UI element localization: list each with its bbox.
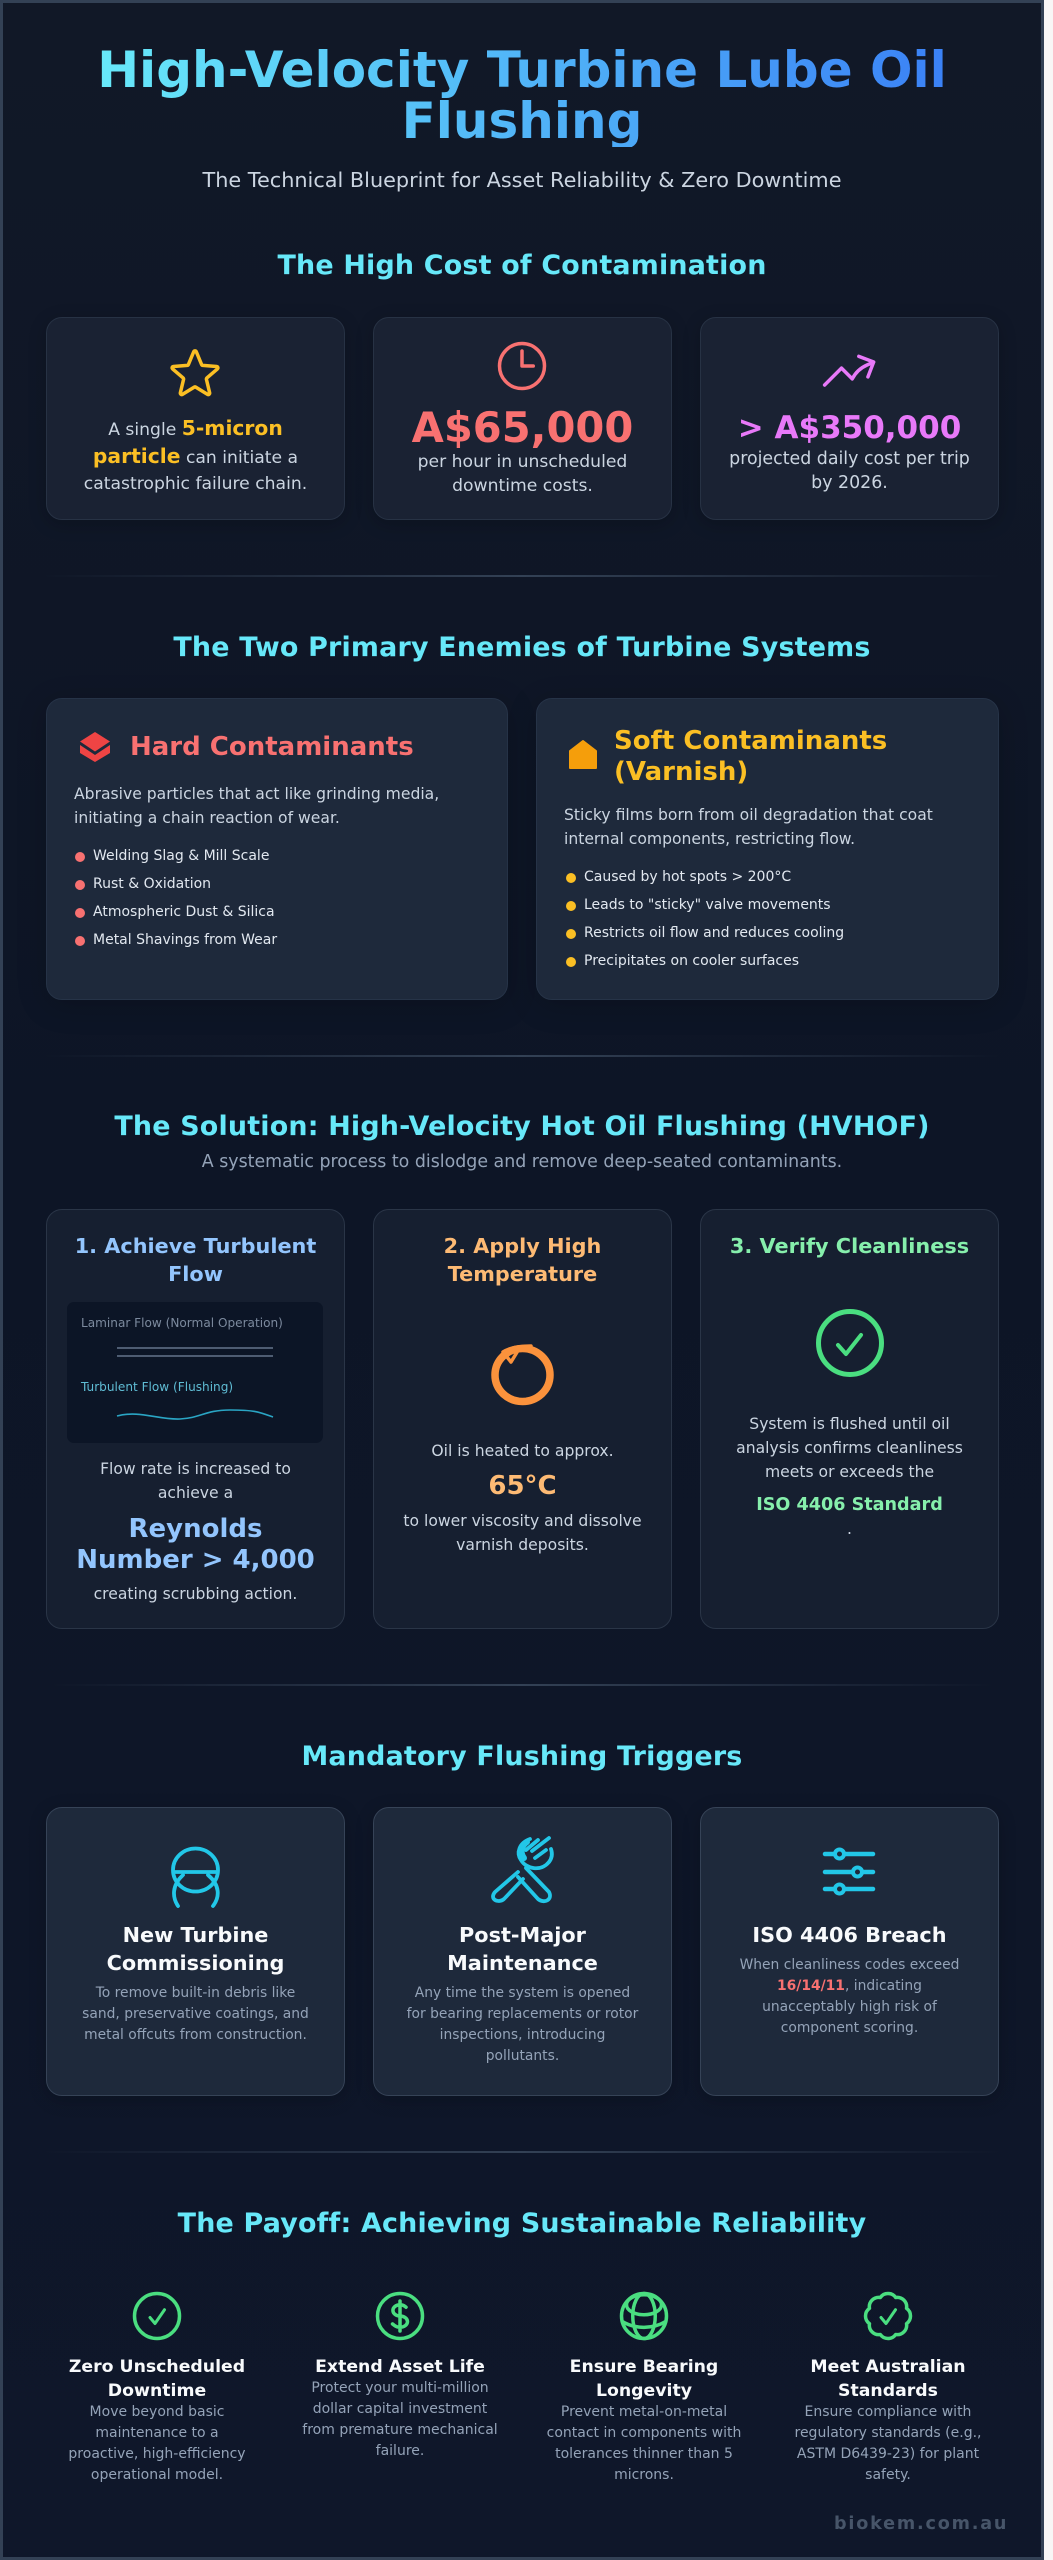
- text: hard description: [74, 785, 439, 827]
- text: ISO 4406 breach: [740, 1957, 959, 2036]
- text: viscosity: to lower viscosity and dissolve: [403, 1512, 642, 1530]
- text: flushed until: analysis confirms cleanliness: [736, 1439, 963, 1457]
- title: Flushing: [402, 92, 642, 150]
- text: new turbine: To remove built-in debris like: [96, 1985, 295, 2001]
- text: bearing longevity: [547, 2404, 741, 2483]
- text: daily cost: [729, 449, 970, 493]
- text: viscosity: varnish deposits.: [456, 1536, 589, 1554]
- list: hard contaminants: Welding Slag & Mill Scale: [93, 848, 269, 864]
- heading: step 3: 3. Verify Cleanliness: [730, 1234, 969, 1258]
- text: zero downtime: [68, 2404, 246, 2483]
- heading: bearing longevity: Ensure Bearing: [570, 2357, 718, 2377]
- text: soft description: internal components, restricting flow.: [564, 830, 855, 848]
- icon: sliders: [822, 1848, 876, 1896]
- text: 5-micron particle: particle can initiate a: [93, 444, 298, 468]
- panel: downtime cost: [373, 317, 672, 520]
- text: 5-micron particle: [84, 416, 307, 494]
- text: extend asset life: from premature mechanical: [302, 2422, 498, 2438]
- list: soft contaminants: Leads to "sticky" valve movements: [584, 897, 831, 913]
- text: soft description: [564, 806, 933, 848]
- text: soft description: Sticky films born from oil degradation that coat: [564, 806, 933, 824]
- text: extend asset life: Protect your multi-million: [311, 2380, 489, 2396]
- heading: zero downtime: Zero Unscheduled: [69, 2357, 245, 2377]
- text: bearing longevity: Prevent metal-on-metal: [561, 2404, 727, 2420]
- text: flushed until: [736, 1415, 963, 1481]
- icon: wrench and screwdriver: [491, 1836, 554, 1904]
- list: soft contaminants: Restricts oil flow and reduces cooling: [584, 925, 844, 941]
- text: flow rate: Flow rate is increased to: [100, 1460, 291, 1478]
- icon: badge check: [858, 2286, 918, 2346]
- heading: post-major maintenance: [447, 1923, 598, 1975]
- stat: ISO 4406 standard: ISO 4406 Standard: [756, 1495, 943, 1515]
- diagram: laminar vs turbulent flow: Turbulent Flow (Flushing): [81, 1380, 233, 1394]
- heading: mandatory triggers: Mandatory Flushing Triggers: [301, 1741, 743, 1772]
- text: flushed until: meets or exceeds the: [765, 1463, 934, 1481]
- payoff: zero unscheduled downtime: [68, 2292, 246, 2483]
- text: extend asset life: [302, 2380, 498, 2459]
- heading: two primary enemies: The Two Primary Enemies of Turbine Systems: [173, 632, 871, 663]
- text: bearing longevity: microns.: [614, 2467, 674, 2483]
- footer: biokem.com.au: biokem.com.au: [834, 2514, 1008, 2534]
- icon: soft contaminants: [569, 740, 597, 769]
- text: downtime cost: per hour in unscheduled: [418, 452, 627, 472]
- text: hard description: Abrasive particles that act like grinding media,: [74, 785, 439, 803]
- icon: trending up: [822, 354, 876, 387]
- text: zero downtime: operational model.: [91, 2467, 223, 2483]
- diagram: laminar vs turbulent flow: Laminar Flow (Normal Operation): [81, 1316, 283, 1330]
- payoff: extend asset life: [302, 2292, 498, 2459]
- subtitle: The Technical Blueprint for Asset Reliability & Zero Downtime: [202, 168, 842, 192]
- title: [0, 45, 1044, 147]
- text: australian standards: ASTM D6439-23) for plant: [797, 2446, 979, 2462]
- text: ISO 4406 breach: component scoring.: [781, 2020, 918, 2036]
- heading: post-major maintenance: Post-Major: [459, 1923, 586, 1947]
- icon: check circle: [132, 2292, 182, 2340]
- text: hard description: initiating a chain reaction of wear.: [74, 809, 340, 827]
- heading: bearing longevity: Longevity: [596, 2381, 692, 2401]
- text: downtime cost: downtime costs.: [452, 476, 593, 496]
- panel: soft contaminants: [536, 698, 999, 1000]
- heading: post-major maintenance: Maintenance: [447, 1951, 598, 1975]
- text: australian standards: safety.: [865, 2467, 911, 2483]
- list: hard contaminants: [75, 848, 278, 948]
- stat: A$350,000: > A$350,000: [738, 410, 961, 446]
- text: ISO 4406 breach: When cleanliness codes exceed: [740, 1957, 959, 1973]
- panel: ISO 4406 breach: [700, 1807, 999, 2096]
- payoff: bearing longevity: [547, 2292, 741, 2483]
- list: hard contaminants: Atmospheric Dust & Silica: [93, 904, 275, 920]
- text: australian standards: regulatory standards (e.g.,: [794, 2425, 982, 2441]
- heading: step 2: 2. Apply High: [444, 1234, 601, 1258]
- list: hard contaminants: Metal Shavings from Wear: [93, 932, 277, 948]
- panel: new turbine: [46, 1807, 345, 2096]
- heading: step 2: Temperature: [448, 1262, 597, 1286]
- heading: step 1: [75, 1234, 316, 1286]
- text: viscosity: [403, 1512, 642, 1554]
- heading: soft contaminants: (Varnish): [614, 757, 748, 787]
- title: High-Velocity Turbine Lube Oil: [97, 41, 947, 99]
- heading: high cost of contamination: The High Cost of Contamination: [277, 250, 767, 281]
- heading: the payoff: The Payoff: Achieving Sustainable Reliability: [178, 2208, 866, 2239]
- text: flow rate: achieve a: [158, 1484, 233, 1502]
- stat: A$65,000: A$65,000: [412, 403, 633, 452]
- text: ISO 4406 breach: unacceptably high risk of: [762, 1999, 937, 2015]
- text: new turbine: sand, preservative coatings, and: [82, 2006, 309, 2022]
- heading: soft contaminants: [614, 726, 887, 787]
- icon: globe: [620, 2292, 668, 2340]
- text: post-major maintenance: Any time the system is opened: [415, 1985, 630, 2001]
- heading: new turbine: [107, 1923, 284, 1975]
- text: extend asset life: failure.: [376, 2443, 424, 2459]
- text: zero downtime: proactive, high-efficiency: [68, 2446, 246, 2462]
- heading: the solution: The Solution: High-Velocity Hot Oil Flushing (HVHOF): [114, 1111, 930, 1142]
- text: zero downtime: Move beyond basic: [90, 2404, 224, 2420]
- text: post-major maintenance: inspections, introducing: [440, 2027, 605, 2043]
- heading: step 1: Flow: [168, 1262, 223, 1286]
- text: ISO 4406 breach: 16/14/11, indicating: [777, 1978, 922, 1994]
- text: period: .: [847, 1520, 852, 1538]
- text: downtime cost: [418, 452, 627, 496]
- heading: step 2: [444, 1234, 601, 1286]
- text: flow rate: [100, 1460, 291, 1502]
- text: australian standards: [777, 2402, 999, 2486]
- text: australian standards: Ensure compliance with: [805, 2404, 971, 2420]
- heading: hard contaminants: Hard Contaminants: [130, 732, 414, 762]
- heading: new turbine: New Turbine: [123, 1923, 268, 1947]
- heading: australian standards: Meet Australian: [810, 2357, 966, 2377]
- stat: Reynolds number: Reynolds: [128, 1514, 262, 1544]
- list: soft contaminants: [566, 869, 844, 969]
- text: zero downtime: maintenance to a: [95, 2425, 219, 2441]
- icon: hard hat: [171, 1846, 220, 1908]
- panel: step 1 turbulent flow: [46, 1209, 345, 1629]
- heading: australian standards: Standards: [838, 2381, 938, 2401]
- stat: Reynolds number: [76, 1514, 315, 1575]
- icon: hard contaminants cube: [80, 732, 110, 762]
- icon: heat ring: [491, 1344, 554, 1406]
- text: 5-micron particle: catastrophic failure chain.: [84, 474, 307, 494]
- heading: step 1: 1. Achieve Turbulent: [75, 1234, 316, 1258]
- text: heated: Oil is heated to approx.: [431, 1442, 614, 1460]
- heading: new turbine: Commissioning: [107, 1951, 284, 1975]
- text: bearing longevity: contact in components with: [547, 2425, 741, 2441]
- list: soft contaminants: Precipitates on cooler surfaces: [584, 953, 799, 969]
- text: bearing longevity: tolerances thinner than 5: [555, 2446, 733, 2462]
- text: new turbine: metal offcuts from construction.: [84, 2027, 307, 2043]
- icon: check circle: [816, 1309, 884, 1377]
- text: extend asset life: dollar capital investment: [313, 2401, 487, 2417]
- heading: extend asset life: Extend Asset Life: [315, 2357, 485, 2377]
- subheading: the solution: A systematic process to dislodge and remove deep-seated contaminants.: [202, 1152, 842, 1172]
- icon: clock: [498, 342, 546, 390]
- icon: dollar: [376, 2292, 424, 2340]
- text: 5-micron particle: A single 5-micron: [108, 416, 283, 440]
- heading: soft contaminants: Soft Contaminants: [614, 726, 887, 756]
- text: post-major maintenance: pollutants.: [486, 2048, 559, 2064]
- panel: step 2 temperature: [373, 1209, 672, 1629]
- heading: zero downtime: Downtime: [108, 2381, 206, 2401]
- heading: australian standards: [777, 2355, 999, 2403]
- panel: post-major maintenance: [373, 1807, 672, 2096]
- text: daily cost: projected daily cost per trip: [729, 449, 970, 469]
- text: scrubbing action: creating scrubbing action.: [94, 1585, 297, 1603]
- list: hard contaminants: Rust & Oxidation: [93, 876, 211, 892]
- text: daily cost: by 2026.: [811, 473, 888, 493]
- panel: 5-micron particle: [46, 317, 345, 520]
- diagram: laminar vs turbulent flow: [67, 1302, 323, 1443]
- heading: zero downtime: [69, 2357, 245, 2401]
- list: soft contaminants: Caused by hot spots > 200°C: [584, 869, 791, 885]
- icon: star: [170, 349, 220, 396]
- text: new turbine: [82, 1985, 309, 2043]
- panel: daily cost: [700, 317, 999, 520]
- text: post-major maintenance: for bearing replacements or rotor: [407, 2006, 638, 2022]
- text: flushed until: System is flushed until oil: [749, 1415, 950, 1433]
- panel: step 3 cleanliness: [700, 1209, 999, 1629]
- text: post-major maintenance: [406, 1985, 638, 2064]
- panel: hard contaminants: [46, 698, 508, 1000]
- heading: ISO 4406 breach: ISO 4406 Breach: [752, 1923, 947, 1947]
- stat: Reynolds number: Number > 4,000: [76, 1545, 315, 1575]
- heading: bearing longevity: [570, 2357, 718, 2401]
- stat: 65°C: 65°C: [488, 1471, 557, 1501]
- payoff: australian standards: [777, 2286, 999, 2488]
